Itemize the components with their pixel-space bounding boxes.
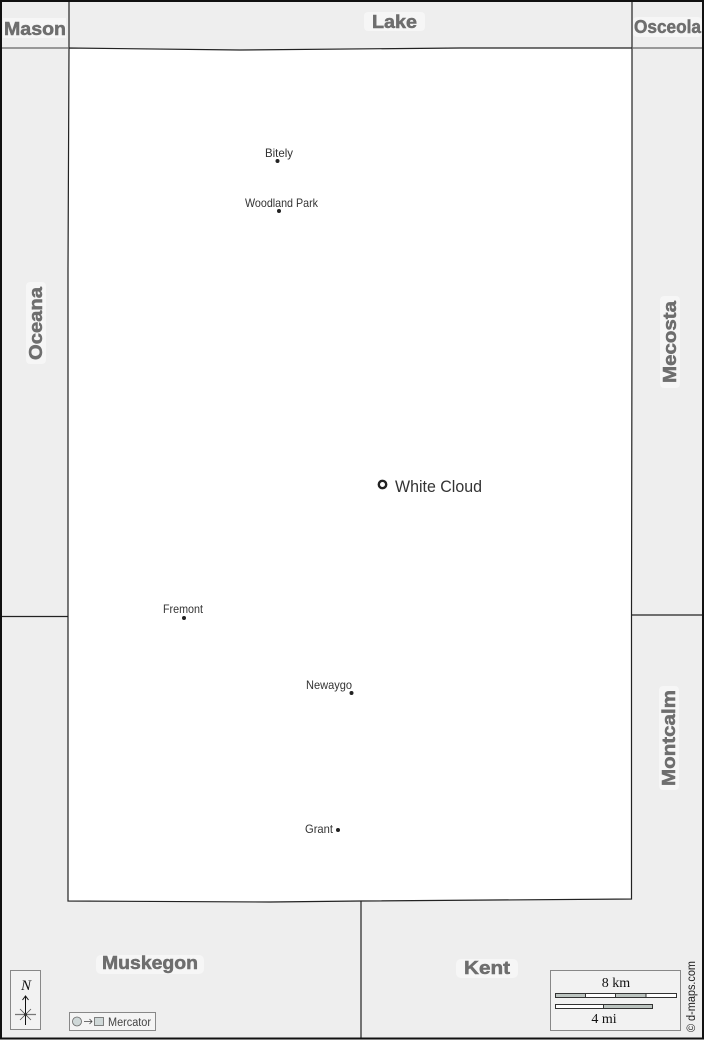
credit: d-maps.com: © d-maps.com [686, 961, 698, 1032]
town: Bitely: Bitely [265, 146, 293, 160]
scale bar: 8 km [602, 976, 630, 991]
icon: north compass: N [20, 978, 32, 994]
label: Mason: Mason [4, 19, 66, 39]
town: Grant: Grant [305, 822, 334, 836]
icon: north compass [10, 970, 40, 1030]
label: Muskegon: Muskegon [102, 953, 198, 973]
panel: Newaygo County [68, 48, 632, 902]
town: White Cloud (county seat): White Cloud [395, 477, 482, 496]
label: Kent: Kent [464, 958, 510, 978]
projection legend: Mercator [70, 1012, 156, 1030]
label: Lake [364, 12, 425, 32]
label: Lake: Lake [372, 12, 417, 32]
scale bar: 4 mi [591, 1012, 617, 1027]
scale bar [550, 970, 680, 1030]
label: Kent [456, 958, 518, 978]
label: Montcalm: Montcalm [659, 690, 679, 786]
projection legend: Mercator: Mercator [108, 1017, 151, 1029]
town: Woodland Park: Woodland Park [245, 196, 319, 210]
label: Oceana: Oceana [26, 286, 46, 360]
label: Mecosta: Mecosta [660, 300, 680, 383]
town: Fremont: Fremont [163, 602, 204, 616]
label: Osceola: Osceola [634, 17, 702, 37]
town: Newaygo: Newaygo [306, 678, 352, 692]
